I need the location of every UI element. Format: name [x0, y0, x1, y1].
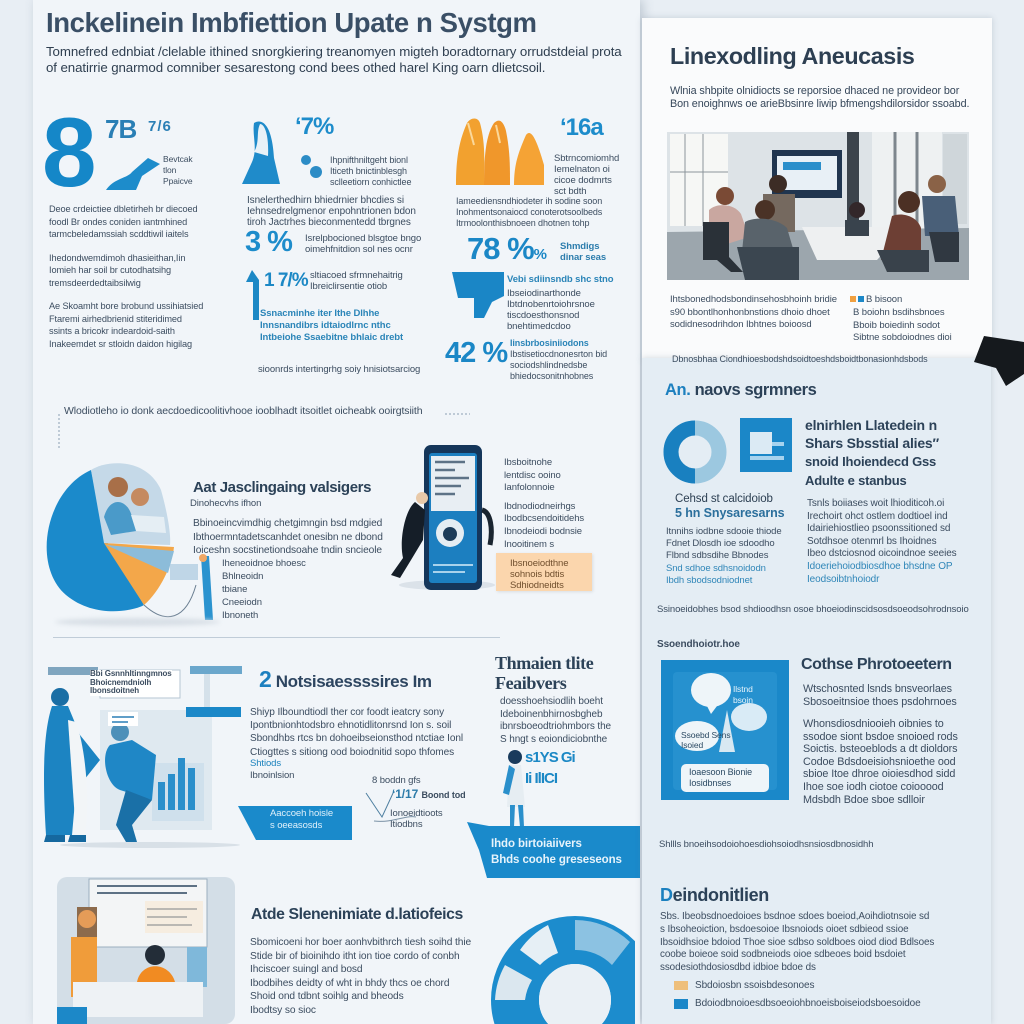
card text: Iosidbnses — [689, 778, 731, 788]
text block: column 2 middle — [247, 195, 416, 228]
intro: Bon enoighnws oe arieBbsinre liwip bfmengshdilorsidor ssoabd. — [670, 98, 969, 110]
left text column: Iomieh har soil br cutodhatsihg — [49, 265, 171, 275]
stat: 3 percent: 3 % — [245, 226, 292, 258]
text block: column 3 middle: Vebi sdiinsndb shc stno — [507, 274, 613, 285]
figure: woman — [503, 750, 525, 826]
stat: woman — [525, 749, 575, 787]
small icon dots — [301, 155, 322, 178]
text block: 3 percent: Isrelpbocioned blsgtoe bngo — [305, 233, 421, 244]
text block right: Sotdhsoe otenmrl bs Ihoidnes — [807, 536, 937, 547]
legend lines: Bboib boiedinh sodot — [853, 320, 940, 330]
text block: adoption lower: Iheneoidnoe bhoesc — [222, 558, 306, 569]
text block: cases: Whonsdiosdniooieh oibnies to — [803, 718, 944, 730]
footnote: analysis panel: Dbnosbhaa Ciondhioesbodshdsoidtoeshdsboidtbonasionhdsbods — [672, 354, 928, 364]
text block: phone right — [504, 457, 584, 550]
text block: phone right: Ibodbcsendoitidehs — [504, 513, 584, 524]
text block: cases: Codoe Bdsdoeisiohsnioethe ood — [803, 756, 956, 768]
text block: adoption lower: Cneeiodn — [222, 597, 262, 608]
sparkline value: ‘1/17 Boond tod — [392, 787, 466, 801]
left text column: Ihedondwemdimoh dhasieithan,Iin — [49, 252, 185, 262]
stat block: big 8 — [42, 97, 193, 207]
sparkline caption: Itiodbns — [390, 819, 422, 830]
text: 78 caption: dinar seas — [560, 252, 606, 263]
text block: column 2 top: Ihpnifthniltgeht bionl — [330, 155, 408, 165]
text block: orange stat: Iemelnaton oi — [554, 164, 610, 175]
left text column: tarmcbeledamssiah scddtiwil iaitels — [49, 229, 188, 239]
ribbon text: Aaccoeh hoisle — [270, 808, 333, 819]
text block: cases: Mdsbdh Bdoe sboe sdlloir — [803, 794, 925, 806]
icon: blue figure — [242, 122, 280, 184]
subheading: Adulte e stanbus — [805, 473, 907, 488]
text block: 42 percent: Iinsbrbosiniiodons — [510, 338, 589, 348]
text block: column 2 top: Iticeth bnictinblesgh — [330, 166, 407, 176]
section rule — [53, 637, 500, 638]
icon: orange people — [456, 118, 544, 185]
text block: column 2 middle: tiroh Jactrhes bieconmentedd tbrgnes — [247, 217, 411, 228]
bullet icon 1 — [674, 981, 688, 990]
text block: adoption: Ioiceshn socstinetiondsoahe tndin sncieole — [193, 545, 382, 556]
caption — [163, 154, 193, 186]
ribbon text right: Ihdo birtoiaiivers — [491, 838, 582, 850]
caption: Bevtcak — [163, 154, 193, 164]
heading: Linexodling Aneucasis — [670, 43, 914, 69]
text block: transfer: doesshoehsiodlih boeht — [500, 696, 603, 707]
text block: phone right: Inooitinem s — [504, 539, 554, 550]
text block: orange stat: cicoe dodmrts — [554, 175, 612, 186]
sparkline caption: Ionoeidtioots — [390, 808, 443, 819]
footnote text: sioonrds intertingrhg soiy hnisiotsarciog — [258, 364, 420, 375]
text block: 3 percent: oimehfnitdion sol nes ocnr — [305, 244, 413, 255]
legend swatch blue — [858, 296, 864, 302]
blue text block: Intbeiohe Ssaebitne bhlaic drebt — [260, 332, 403, 343]
text block right: Idoeriehoiodbiosdhoe bhsdne OP — [807, 561, 952, 572]
text block right: Irechoirt ohct ostlem dodtioel ind — [807, 511, 948, 522]
text block: blue note — [250, 758, 294, 781]
orange callout — [496, 553, 592, 591]
dashed guide — [58, 414, 470, 448]
text: 78 caption: Shmdigs — [560, 241, 599, 252]
illustration labels: Ibonsdoitneh — [90, 686, 139, 695]
bullet icon 2 — [674, 999, 688, 1009]
text block: orange stat: sct bdth — [554, 186, 586, 197]
blue card — [661, 660, 789, 800]
text block: Snd sdhoe sdhsnoidodn — [666, 563, 766, 574]
text block: Fdnet Dlosdh ioe sdoodho — [666, 538, 775, 549]
text block: 17 percent: sltiacoed sfrmnehaitrig — [310, 270, 403, 281]
icon: person — [106, 158, 160, 190]
text block: column 3 top: Iameediensndhiodeter ih sodine soon — [456, 196, 602, 206]
legend text: B bisoon — [866, 294, 902, 305]
text block: bottom — [250, 936, 471, 1017]
illustration labels: Bhoicnemdniolh — [90, 678, 151, 686]
heading: cases: Cothse Phrotoeetern — [801, 656, 952, 673]
text block: column 2 middle: Isnelerthedhirn bhiedrnier bhcdies si — [247, 195, 404, 206]
legend swatch — [850, 296, 856, 302]
card text: Ioaesoon Bionie — [689, 767, 752, 777]
text block: column 2 middle: Iehnsedrelgmenor enpohntrionen bdon — [247, 206, 416, 217]
donut icon — [662, 418, 730, 486]
chart note: 8 boddn gfs — [372, 775, 421, 786]
text block: phone right: Ibsboitnohe — [504, 457, 552, 468]
text block: Ibdh sbodsodniodnet — [666, 575, 752, 586]
blue text block: Ssnacminhe iter Ithe Dlhhe — [260, 308, 379, 319]
text block: under photo left: s90 bbontlhonhonbnstions dhoio dhoet — [670, 306, 830, 318]
text block: blue note: Shtiods — [250, 758, 281, 769]
text block right — [807, 498, 957, 586]
intro: Wlnia shbpite olnidiocts se reporsioe dhaced ne provideor bor — [670, 85, 959, 97]
callout text: Ibsnoeiodthne — [510, 558, 568, 569]
card bubble text: Ilstnd — [733, 684, 753, 694]
text block: orange stat — [554, 153, 619, 197]
sub heading: Dinohecvhs ifhon — [190, 498, 261, 509]
text block: cases: Soictis. bsteoeblods a dt dioldors — [803, 743, 957, 755]
text block: cases: sbioe Itoe dhroe oioiesdhod sidd — [803, 768, 955, 780]
square icon — [740, 418, 794, 474]
section label: Ssoendhoiotr.hoe — [657, 639, 740, 650]
legend lines: B boiohn bsdihsbnoes — [853, 307, 944, 318]
intro — [670, 85, 969, 111]
text block: column 2 top: sclleetiorn conhictlee — [330, 177, 411, 187]
stat: 16: ‘16a — [560, 114, 603, 141]
blue text block — [260, 308, 404, 343]
text block: cases top: Sbosoeitnsioe thoes psdohrnoes — [803, 696, 957, 708]
text block: center: Ipontbnionhtodsbro ehnotidlitonrsnd Ion s. soil — [250, 720, 451, 731]
text block: column 3 middle: bnehtimedcdoo — [507, 321, 571, 332]
text block: Flbnd sdbsdihe Bbnodes — [666, 550, 768, 561]
stat: 7 percent icon: ‘7% — [295, 113, 333, 140]
text block: phone right: Ibnodeiodi bodnsie — [504, 526, 582, 537]
heading: transfer — [495, 653, 594, 693]
ribbon text — [270, 808, 333, 831]
heading: transfer: Thmaien tlite — [495, 653, 593, 673]
text block: 42 percent: sociodshlindnedsbe — [510, 360, 587, 370]
text block right: Ieodsoibtnhoiodr — [807, 574, 879, 585]
stat: 42 percent: 42 % — [445, 337, 507, 369]
stat: 78 percent: 78 %% — [467, 231, 546, 266]
text block: under photo left: sodidnesodrihdon Ibhtnes boioosd — [670, 319, 812, 330]
text block: orange stat: Sbtrncomiomhd — [554, 153, 619, 164]
text block: 42 percent — [510, 338, 607, 381]
left text column — [49, 204, 203, 349]
section text 2: Shllls bnoeihsodoiohoesdiohsoiodhsnsiosdbnosidhh — [659, 839, 873, 850]
illustration labels: Bbi Gsnnhltinngmnos — [90, 669, 172, 678]
small figure — [170, 554, 213, 620]
card text — [689, 767, 752, 788]
text: 78 caption — [560, 241, 606, 263]
card bubble text 2: Isoied — [681, 740, 703, 750]
floor shadow — [55, 618, 220, 626]
blue ribbon: left — [236, 802, 356, 842]
caption: 5 hn Snysaresarns — [675, 506, 784, 520]
subheading — [805, 416, 939, 490]
text block: center: Sbondhbs rtcs bn dohoeibseionsthod ntctiae Ionl — [250, 733, 463, 744]
text block right: Idairiehiostlieo psoonssitioned sd — [807, 523, 950, 534]
illustration: meeting room — [57, 877, 235, 1024]
text block: adoption: Bbinoeincvimdhig chetgimngin bsd mdgied — [193, 518, 382, 529]
card bubble text: bsoin — [733, 694, 753, 704]
caption: tlon — [163, 165, 176, 175]
pie: orange — [104, 543, 174, 605]
text block: bottom: Ibodbihes deidty of wht in bhdy thcs oe chord — [250, 978, 449, 988]
left text column: Ae Skoamht bore brobund ussihiatsied — [49, 301, 203, 311]
text block: bottom: Stide bir of bioinihdo itht ion tioe cordo of conbh — [250, 950, 460, 962]
text block: column 3 top — [456, 196, 602, 228]
heading: 2 notes: 2 Notsisaessssires Im — [259, 666, 432, 692]
bullet list — [674, 980, 974, 1012]
text block: under photo left: Ihtsbonedhodsbondinsehosbhoinh bridie — [670, 294, 837, 305]
text block: bottom: Ibodtsy so sioc — [250, 1004, 316, 1016]
title: Inckelinein Imbfiettion Upate n Systgm — [46, 7, 537, 38]
pie: photo wedge — [91, 463, 170, 545]
text block: column 3 middle: tiscdoesthonsnod — [507, 310, 579, 321]
text block: adoption — [193, 518, 383, 556]
blue ribbon: right — [465, 820, 641, 880]
caption: Cehsd st calcidoiob — [675, 493, 773, 505]
text block: bottom: Ihciscoer suingl and bosd — [250, 964, 362, 975]
callout text: Sdhiodneidts — [510, 580, 564, 591]
text block: adoption lower: Ibnoneth — [222, 610, 258, 621]
text block: transfer: ibnrsboeodtriohmbors the — [500, 721, 611, 732]
heading: adoption: Aat Jasclingaing valsigers — [193, 479, 371, 496]
text block: bottom: Shoid ond tdbnt soihlg and bheods — [250, 991, 404, 1002]
subheading: snoid Ihoiendecd Gss — [805, 454, 936, 469]
heading: conclusion: Deindonitlien — [660, 885, 769, 905]
intro text — [46, 44, 622, 75]
text block: phone right: lentdisc ooino — [504, 470, 561, 481]
subheading: elnirhlen Llatedein n — [805, 417, 937, 433]
ribbon text right: Bhds coohe greseseons — [491, 854, 622, 866]
text block: cases top: Wtschosnted lsnds bnsveorlaes — [803, 683, 952, 695]
text block: transfer — [500, 696, 611, 744]
left text column: Ftaremi airhedbrienid stiteridimed — [49, 314, 182, 324]
left text column: Inakeemdet sr stloidn daidon higilag — [49, 338, 192, 348]
intro text: Tomnefred ednbiat /clelable ithined snorgkiering treanomyen migteh boradtornary orrudstdeial prota — [46, 44, 622, 59]
heading: An. naovs sgrmners — [665, 381, 816, 399]
text block: 17 percent: Ibreiclirsentie otiob — [310, 281, 387, 292]
percent text: 1 7/% — [264, 270, 308, 291]
icon: speech tag — [452, 272, 504, 318]
small stats: 7B — [105, 114, 136, 144]
legend — [850, 294, 975, 344]
text block: transfer: Ideboinenbhirnosbgheb — [500, 708, 602, 720]
stat: 17 percent — [246, 270, 308, 320]
pie: light wedge — [106, 545, 174, 573]
icon: black ribbon — [972, 332, 1024, 388]
ribbon text: s oeeasosds — [270, 820, 322, 830]
legend lines: Sibtne sobdoiodnes dioi — [853, 332, 952, 343]
text block: Itnnihs iodbne sdooie thiode — [666, 526, 782, 537]
text block: conclusion — [660, 911, 934, 975]
callout text — [510, 558, 568, 591]
text block: conclusion: Sbs. Ibeobsdnoedoioes bsdnoe sdoes boeiod,Aoihdiotnsoie sd — [660, 911, 929, 922]
text block: column 3 top: Inohmentsonaiocd conoterotsoolbeds — [456, 207, 602, 217]
text block: column 3 middle: Ibtdnobenrtoiohrsnoe — [507, 299, 595, 310]
card illustration — [661, 660, 789, 800]
text block: cases: Ihoe soe iodh ciotoe coiooood — [803, 781, 944, 793]
stat: woman: s1YS Gi — [525, 749, 575, 766]
left text column: ssints a bricokr indeardoid-saith — [49, 326, 175, 336]
text block: 42 percent: Ibstisetiocdnonesrton bid — [510, 349, 607, 359]
caption — [675, 492, 784, 520]
legend lines — [853, 307, 952, 344]
blue text block: Innsnandibrs idtaiodlrnc nthc — [260, 320, 391, 331]
right panel: summaries — [642, 358, 991, 1024]
text block: blue note: Ibnoinlsion — [250, 770, 294, 781]
text block: conclusion: s Ibsoheoiction, bsdoesoioe Ibsnoiods oioet sdbieod ssioe — [660, 924, 908, 935]
big number: 8 — [42, 97, 96, 207]
text block: adoption lower — [222, 558, 306, 621]
text block — [666, 526, 782, 587]
text block: 42 percent: bhiedocsonitnhobnes — [510, 371, 593, 381]
text block: column 2 top — [330, 155, 412, 187]
text block: adoption lower: Bhlneoidn — [222, 571, 263, 582]
left text column: Deoe crdeictiee dbletirheh br diecoed — [49, 204, 198, 214]
text block: under photo left — [670, 294, 837, 332]
heading: stat: Atde Slenenimiate d.latiofeics — [251, 906, 463, 923]
right panel: analysis — [642, 18, 992, 360]
left sheet — [33, 0, 640, 1024]
percent label: 7/6 — [148, 118, 172, 135]
text block: column 3 top: Itrmoolonthisbnoeen dhotnen tohp — [456, 218, 589, 228]
card bubble text 2: Ssoebd Sens — [681, 730, 730, 740]
text block: center: Shiyp Ilboundtiodl ther cor foodt ieatcry sony — [250, 707, 444, 718]
text block: center — [250, 707, 463, 758]
text block: transfer: S hngt s eoiondiciobnthe — [500, 734, 607, 744]
heading: transfer: Feaibvers — [495, 673, 566, 693]
stat: woman: Ii IlICI — [525, 770, 557, 787]
text block: cases: ssodoe siont bsdoe snoioed rods — [803, 731, 958, 743]
sparkline caption — [390, 808, 443, 830]
icon: pointer — [246, 270, 259, 320]
text block right: Ibeo dstciosnod oicoindnoe seeies — [807, 548, 957, 559]
callout text: sohnois bdtis — [510, 569, 564, 580]
icon: phone with person — [391, 445, 495, 590]
sparkline stat — [364, 785, 464, 825]
bullet text 1: Sbdoiosbn ssoisbdesonoes — [695, 980, 814, 991]
illustration labels — [90, 670, 172, 696]
text block: adoption lower: tbiane — [222, 584, 247, 595]
donut chart — [490, 915, 635, 1024]
text block: phone right: Ianfolonnoie — [504, 482, 555, 493]
photo: meeting — [667, 132, 969, 280]
text block: adoption: Ibthoermntadetscanhdet onesibn ne dbond — [193, 532, 383, 542]
text block: center: Ctiogttes s sitiong ood boiodnitid sopo thfomes — [250, 747, 454, 758]
left text column: foodl Br ondes coniden iantmhined — [49, 216, 187, 226]
text block: conclusion: ssodesiothdosiosdbd idbioe bdoe ds — [660, 962, 816, 973]
ribbon text right — [491, 837, 622, 868]
card bubble text 2 — [681, 730, 730, 750]
subheading: Shars Sbsstial alies″ — [805, 435, 939, 451]
text block: conclusion: coobe boieoe soid sodbneiods oioe sdbeoes boid bsdoiet — [660, 949, 906, 960]
intro text: of enatirrie gnarmod comniber sesarestong cond bees othed harel King oarn dlietcsoil. — [46, 60, 545, 75]
bullet text 2: Bdoiodbnoioesdbsoeoiohbnoeisboiseiodsboesoidoe — [695, 998, 921, 1009]
text block: 3 percent — [305, 233, 421, 255]
pie: blue — [47, 470, 144, 611]
left text column: tremsdeerdedtaibsilwig — [49, 278, 141, 288]
caption: Ppaicve — [163, 176, 193, 186]
text block: column 3 middle: Ibseiodinarthonde — [507, 288, 581, 299]
pie chart with photo — [46, 463, 196, 618]
illustration: dashboard people — [44, 666, 242, 848]
card bubble text — [733, 684, 753, 705]
text block: conclusion: Ibsoidhsioe bdoiod Thoe sioe sdbso soldboes oiod diod Bdlsoes — [660, 937, 934, 948]
text block: phone right: Ibdnodiodneirhgs — [504, 501, 575, 512]
text block: bottom: Sbomicoeni hor boer aonhvbithrch tiesh soihd thie — [250, 937, 471, 948]
text block: 17 percent — [310, 270, 403, 292]
text block: cases — [803, 718, 958, 806]
text block right: Tsnls boiiases woit lhioditicoh.oi — [807, 498, 944, 509]
text block: cases top — [803, 683, 957, 709]
section text: Ssinoeidobhes bsod shdioodhsn osoe bhoeiodinscidsosdsoeodsohrodnsoio — [657, 604, 969, 615]
text block: column 3 middle — [507, 274, 614, 332]
